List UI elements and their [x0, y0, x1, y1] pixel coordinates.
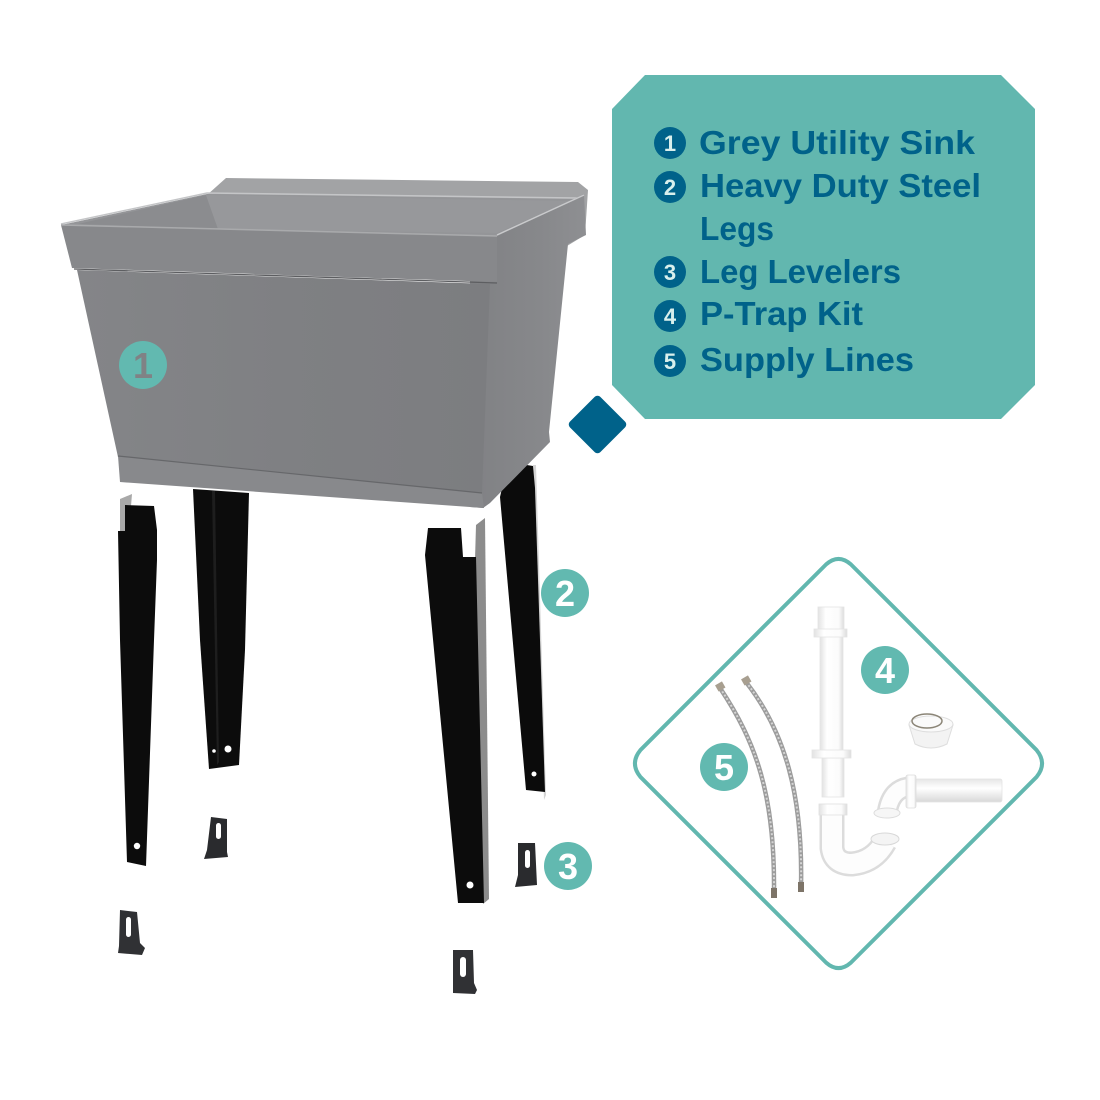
leg: back right steel leg: [500, 462, 546, 800]
icon: supply line hoses: [715, 675, 804, 898]
number badge 5: 5: [714, 747, 734, 788]
sink inner basin: [61, 194, 577, 236]
list item 4: 4: [664, 304, 677, 329]
number badge 2: [541, 569, 589, 617]
list item 2: [654, 167, 981, 247]
leg: front left steel leg: [118, 494, 157, 866]
list item 1: 1: [664, 131, 676, 156]
leveler: back left: [204, 817, 228, 859]
list item 4: P-Trap Kit: [700, 295, 863, 332]
panel: parts list: [612, 75, 1035, 419]
sink: grey utility tub: [61, 178, 588, 508]
list item 1: Grey Utility Sink: [699, 124, 976, 161]
icon: tailpiece pipe: [812, 607, 851, 797]
list item 2: Heavy Duty Steel: [700, 167, 981, 204]
list item 5: Supply Lines: [700, 341, 914, 378]
icon: p-trap bend: [819, 804, 899, 864]
number badge 5: [700, 743, 748, 791]
number badge 3: 3: [558, 846, 578, 887]
panel: plumbing diamond outline: [635, 559, 1042, 968]
leveler: front left: [118, 910, 145, 955]
number badge 4: [861, 646, 909, 694]
leg: back left steel leg: [193, 489, 249, 769]
icon: drain stopper: [909, 714, 953, 748]
number badge 1: 1: [133, 345, 153, 386]
sink right side: [470, 194, 586, 508]
number badge 1: [119, 341, 167, 389]
number badge 2: 2: [555, 573, 575, 614]
sink back flange: [207, 178, 588, 246]
leg: front right steel leg: [425, 518, 489, 904]
number badge 4: 4: [875, 650, 895, 691]
number badge 3: [544, 842, 592, 890]
sink bottom band: [118, 456, 484, 508]
list item 3: Leg Levelers: [700, 253, 901, 290]
leveler: back right: [515, 843, 537, 887]
list item 5: 5: [664, 349, 676, 374]
icon: elbow pipe: [874, 775, 1002, 818]
list item 3: 3: [664, 260, 676, 285]
list item 2: 2: [664, 175, 676, 200]
sink body: [77, 270, 490, 494]
sink front rim: [61, 225, 497, 282]
leveler: front right: [453, 950, 477, 994]
list item 2: Legs: [700, 210, 774, 247]
connector diamond: [567, 394, 628, 455]
